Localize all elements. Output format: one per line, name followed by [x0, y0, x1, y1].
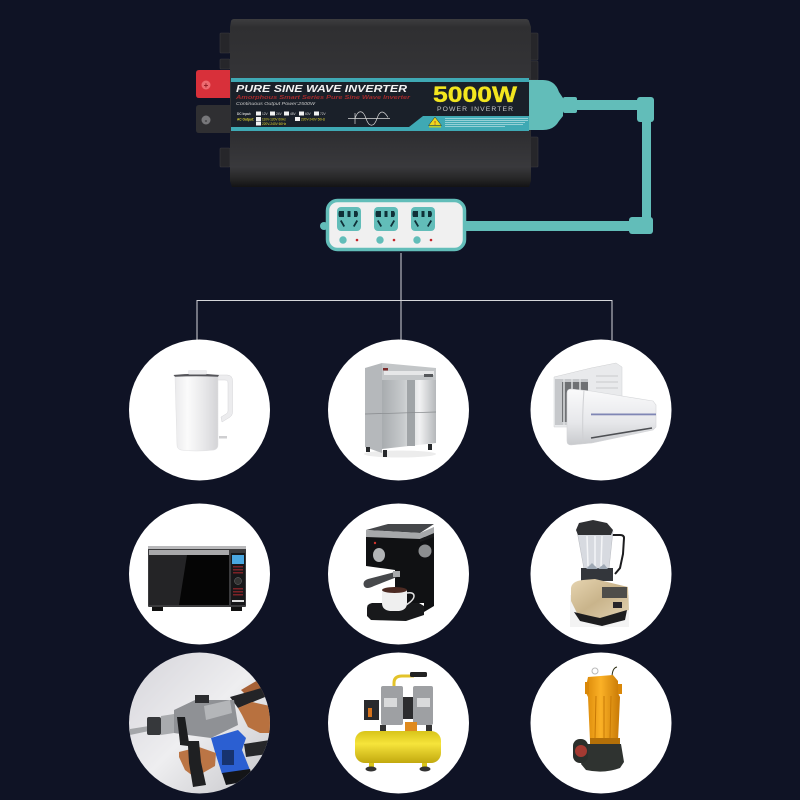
positive terminal: +: [204, 81, 209, 90]
chuck: [147, 717, 161, 735]
AC output options: 110V-120V 60Hz: [262, 117, 286, 121]
connector lines: [197, 253, 612, 340]
socket 2: [374, 207, 398, 231]
microwave: [148, 546, 246, 611]
air conditioner: [554, 363, 656, 445]
blender: [570, 520, 629, 627]
main body: [366, 537, 434, 612]
drip tray: [367, 603, 424, 621]
foot: [574, 610, 627, 626]
socket 3: [411, 207, 435, 231]
front label: [231, 78, 529, 131]
kettle: [174, 370, 232, 451]
coffee machine: [364, 524, 434, 621]
positive terminal: [196, 70, 230, 98]
hand on grip: [179, 747, 216, 776]
circle: air conditioner: [530, 340, 672, 480]
rotary hammer drill: [130, 675, 270, 787]
sine wave symbol: [348, 112, 390, 125]
side panel: [365, 363, 382, 453]
DC input options: [237, 112, 327, 116]
power strip: [320, 200, 464, 250]
warning icon: [428, 117, 442, 128]
circle: submersible pump: [530, 652, 672, 794]
doors: [382, 380, 436, 449]
circle: air compressor: [328, 652, 469, 794]
circle: refrigerator: [328, 340, 469, 480]
refrigerator: [364, 363, 436, 458]
circle: blender: [530, 504, 672, 644]
circle: coffee machine: [328, 504, 469, 644]
steam knob: [418, 544, 432, 558]
rear lower housing: [244, 740, 270, 757]
power inverter caption: POWER INVERTER: [437, 106, 513, 113]
inverter: [196, 19, 538, 187]
hand on rear handle: [238, 702, 270, 733]
blue housing: [211, 730, 250, 774]
air compressor: [355, 672, 441, 772]
negative terminal: -: [205, 116, 208, 125]
tank: [355, 731, 441, 763]
DC input options: 60V: [305, 112, 312, 116]
side strap: [177, 717, 189, 743]
DC input options: 24V: [276, 112, 283, 116]
outdoor unit: [554, 363, 622, 427]
DC input options: DC Input:: [237, 112, 251, 116]
collar: [581, 568, 613, 581]
dial: [373, 548, 385, 562]
submersible pump: [573, 667, 624, 772]
base: [571, 579, 629, 619]
circle: rotary hammer drill: [129, 652, 270, 794]
power cable: [462, 97, 654, 234]
top panel: [382, 363, 436, 380]
circle: kettle: [129, 340, 270, 480]
tool body: [174, 700, 238, 738]
socket 1: [337, 207, 361, 231]
indoor unit: [567, 389, 656, 445]
negative terminal: [196, 105, 230, 133]
wattage: 5000W: [433, 82, 518, 107]
mounting tabs: [220, 33, 538, 167]
AC output options: 220V-240V 60Hz: [262, 122, 287, 126]
grip: [180, 741, 206, 787]
label title: PURE SINE WAVE INVERTER: [236, 84, 408, 95]
coffee cup: [382, 587, 414, 611]
warning text: [445, 118, 528, 127]
forearm: [241, 681, 264, 696]
AC output options: 220V-240V 50Hz: [301, 117, 326, 121]
top plate: [366, 524, 434, 533]
jar: [577, 531, 613, 569]
AC output options: AC Output:: [237, 117, 254, 121]
DC input options: 48V: [290, 112, 297, 116]
rear handle: [230, 688, 265, 708]
steam wand: [364, 572, 397, 588]
lid: [576, 520, 613, 535]
AC output options: [237, 117, 326, 126]
switches and indicators: [339, 236, 432, 244]
handle: [610, 535, 624, 574]
warning icon: !: [434, 121, 436, 127]
label subtitle: Amorphous Smart Series Pure Sine Wave Inverter: [235, 95, 411, 101]
DC input options: 72V: [320, 112, 327, 116]
infographic canvas: [129, 19, 672, 794]
continuous output: Continuous Output Power:2500W: [236, 101, 316, 106]
inverter body: [230, 19, 531, 187]
plug: [529, 80, 563, 130]
circle: microwave: [129, 504, 270, 644]
DC input options: 12V: [262, 112, 269, 116]
